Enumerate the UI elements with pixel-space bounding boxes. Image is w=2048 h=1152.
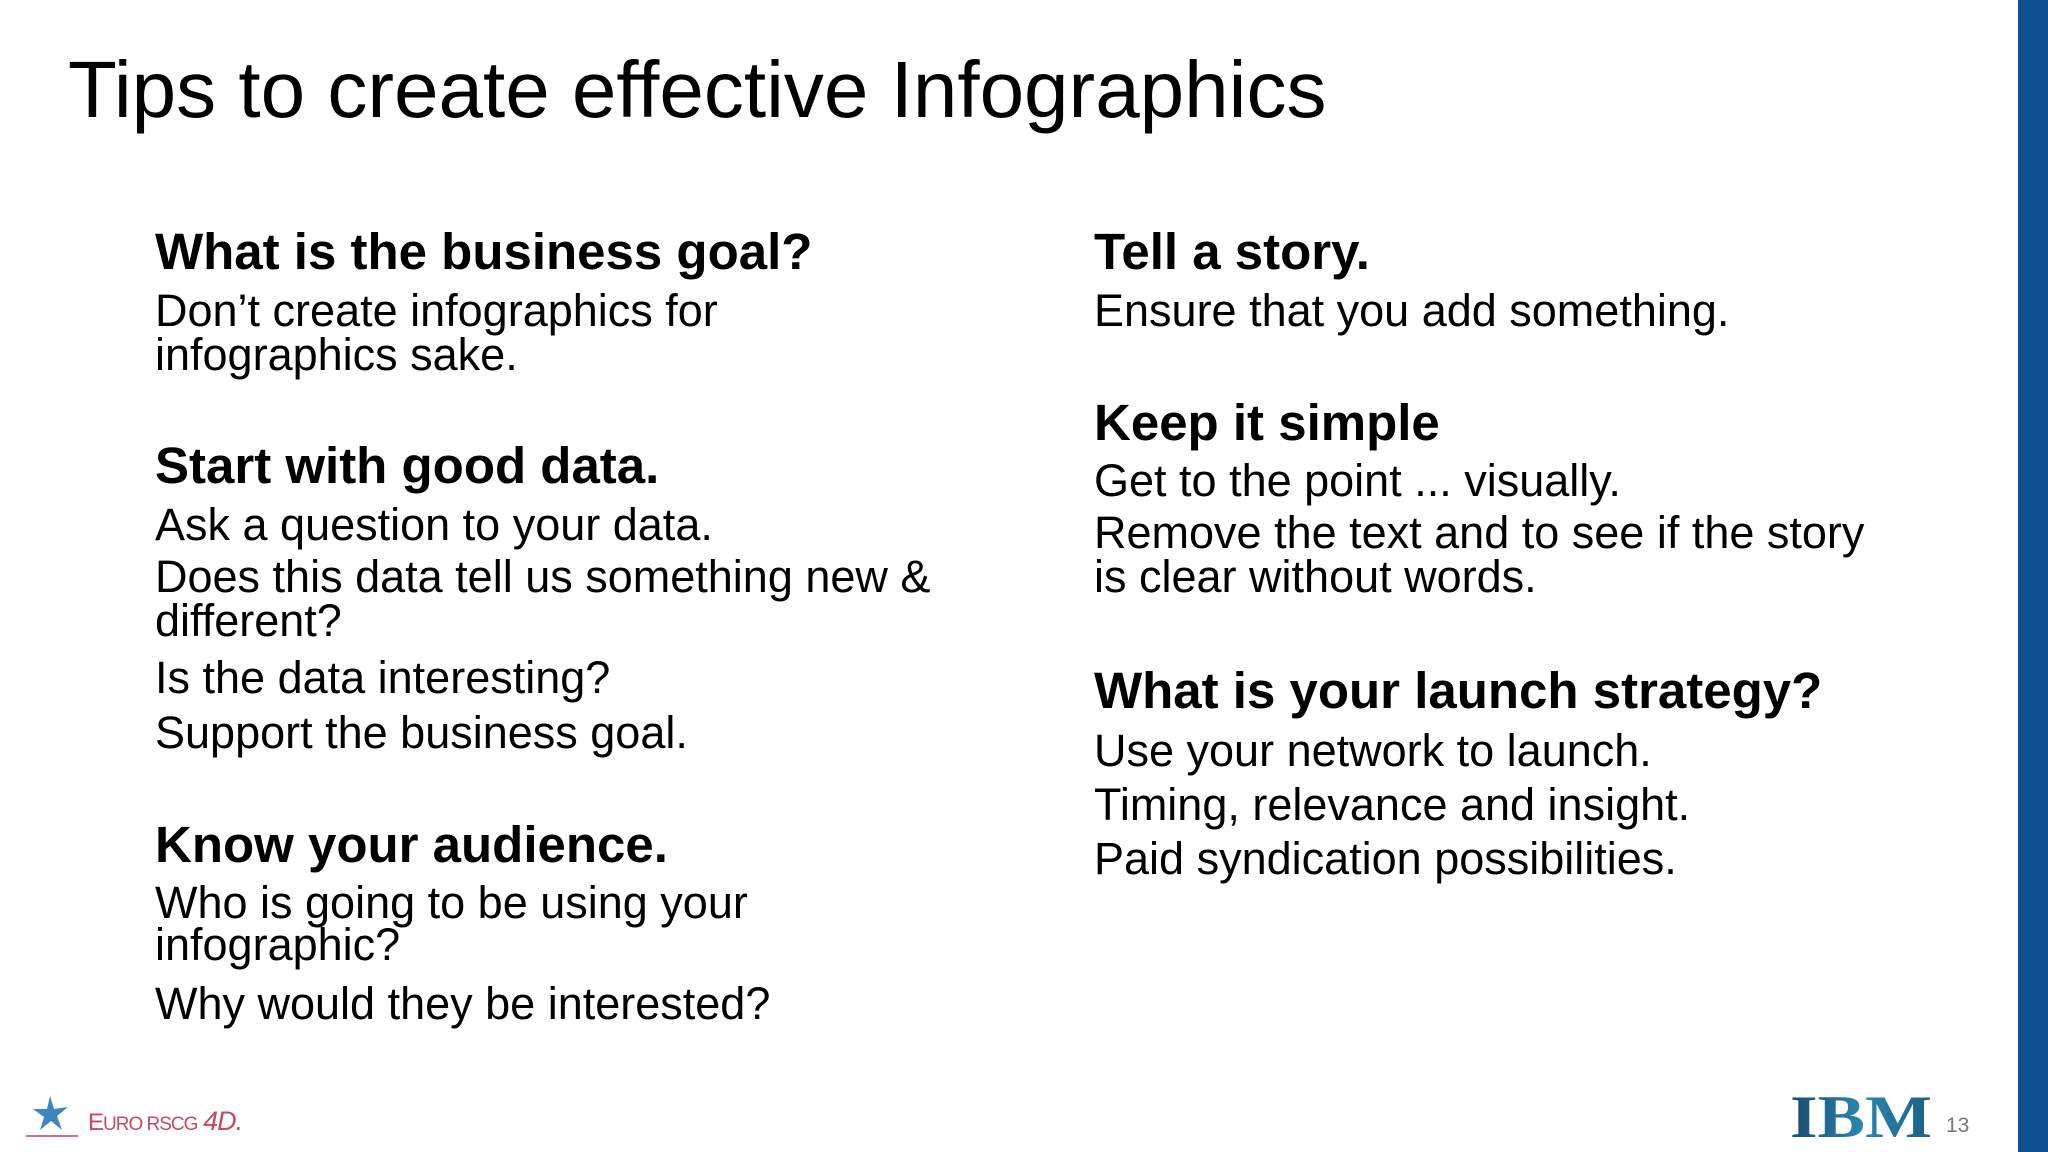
heading: story: Tell a story. (1094, 223, 1370, 280)
text: audience: Why would they be interested? (155, 978, 770, 1029)
text: launch: Use your network to launch. (1094, 725, 1652, 776)
text: business goal (155, 285, 718, 380)
text: story: Ensure that you add something. (1094, 285, 1729, 336)
text: good data: Does this data tell us something new & (155, 551, 930, 602)
text: good data: Ask a question to your data. (155, 499, 713, 550)
icon: star (26, 1096, 78, 1137)
text: audience (155, 877, 770, 1029)
text: simple: Remove the text and to see if the story (1094, 507, 1864, 558)
title: Tips to create effective Infographics (68, 45, 1326, 134)
heading: business goal: What is the business goal? (155, 223, 812, 280)
heading: simple: Keep it simple (1094, 394, 1440, 451)
text: good data: Is the data interesting? (155, 652, 610, 703)
text: Euro RSCG 4D: EURO RSCG 4D. (88, 1106, 242, 1136)
text: good data: Support the business goal. (155, 707, 688, 758)
text: business goal: Don’t create infographics for (155, 285, 718, 336)
heading: good data: Start with good data. (155, 437, 659, 494)
text: simple (1094, 455, 1864, 602)
text: launch: Timing, relevance and insight. (1094, 779, 1690, 830)
text: good data (155, 499, 930, 758)
text: audience: infographic? (155, 919, 400, 970)
text: launch (1094, 725, 1690, 884)
panel: left column (155, 223, 930, 1029)
text: audience: Who is going to be using your (155, 877, 748, 928)
text: simple: is clear without words. (1094, 551, 1537, 602)
logo: Euro RSCG 4D (26, 1096, 242, 1137)
panel: right column (1094, 223, 1864, 884)
heading: launch: What is your launch strategy? (1094, 662, 1822, 719)
heading: audience: Know your audience. (155, 816, 668, 873)
page number: 13 (1946, 1114, 1969, 1137)
text: launch: Paid syndication possibilities. (1094, 833, 1677, 884)
text: business goal: infographics sake. (155, 329, 518, 380)
text: simple: Get to the point ... visually. (1094, 455, 1621, 506)
text: good data: different? (155, 595, 342, 646)
blue side bar (2018, 0, 2048, 1152)
